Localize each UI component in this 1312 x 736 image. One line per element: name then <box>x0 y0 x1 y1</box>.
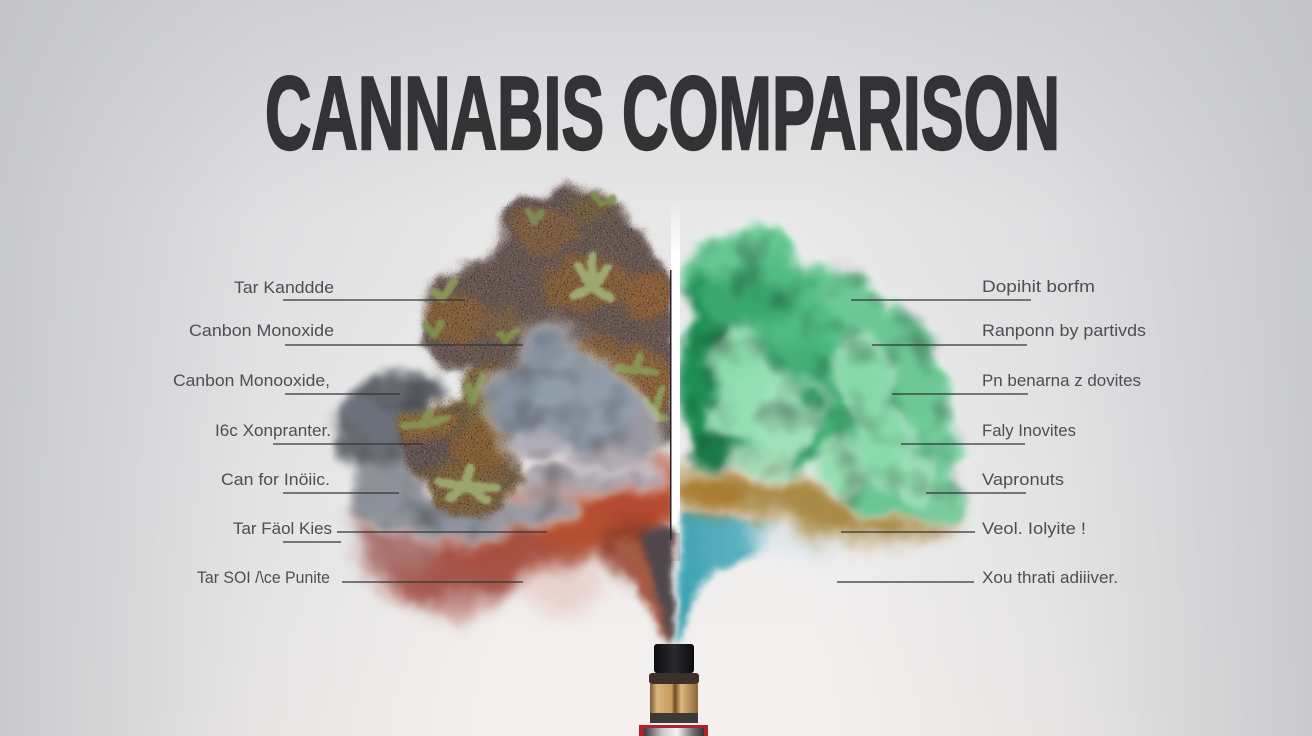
dark grey smoke <box>335 366 666 542</box>
label: Ranponn by partivds <box>982 321 1146 340</box>
label: Tar Fäol Kies <box>233 519 332 538</box>
icon: vape tank <box>650 684 698 714</box>
blue-grey smoke <box>491 318 658 478</box>
label: Canbon Monooxide, <box>173 371 330 390</box>
label: Tar Kanddde <box>234 278 334 297</box>
green cloud body <box>676 226 968 528</box>
label: Pn benarna z dovites <box>982 371 1141 390</box>
amber base <box>670 466 950 541</box>
label: Veol. Iolyite ! <box>982 519 1086 538</box>
icon: vape steel band <box>644 728 704 736</box>
label: Tar SOI /\ce Punite <box>197 568 330 587</box>
right labels: vapour <box>982 277 1146 587</box>
label: Can for Inöiic. <box>221 470 330 489</box>
pale vapour <box>758 533 842 557</box>
left leader lines <box>273 300 547 582</box>
icon: vape mouthpiece <box>654 644 694 673</box>
icon: vape tank base <box>650 713 698 723</box>
red smoke <box>357 451 685 618</box>
icon: vape body <box>639 725 708 736</box>
label: Vapronuts <box>982 470 1064 489</box>
left smoke plume <box>612 530 673 642</box>
lighter vapour lumps <box>709 331 933 500</box>
vape device <box>639 644 708 736</box>
leaves <box>404 194 666 500</box>
bud <box>395 185 676 515</box>
right leader lines <box>837 300 1031 582</box>
left labels: cannabis smoke <box>173 278 334 587</box>
label: Dopihit borfm <box>982 277 1095 296</box>
label: Faly Inovites <box>982 421 1076 440</box>
icon: vape collar <box>649 673 699 684</box>
centre dark edge <box>670 270 672 540</box>
teal smoke plume <box>676 510 785 642</box>
label: Canbon Monoxide <box>189 321 334 340</box>
green vapour cloud <box>670 226 968 557</box>
label: I6c Xonpranter. <box>215 421 331 440</box>
centre divider <box>671 198 680 598</box>
cannabis smoke and bud illustration <box>335 185 685 618</box>
label: Xou thrati adiiiver. <box>982 568 1118 587</box>
